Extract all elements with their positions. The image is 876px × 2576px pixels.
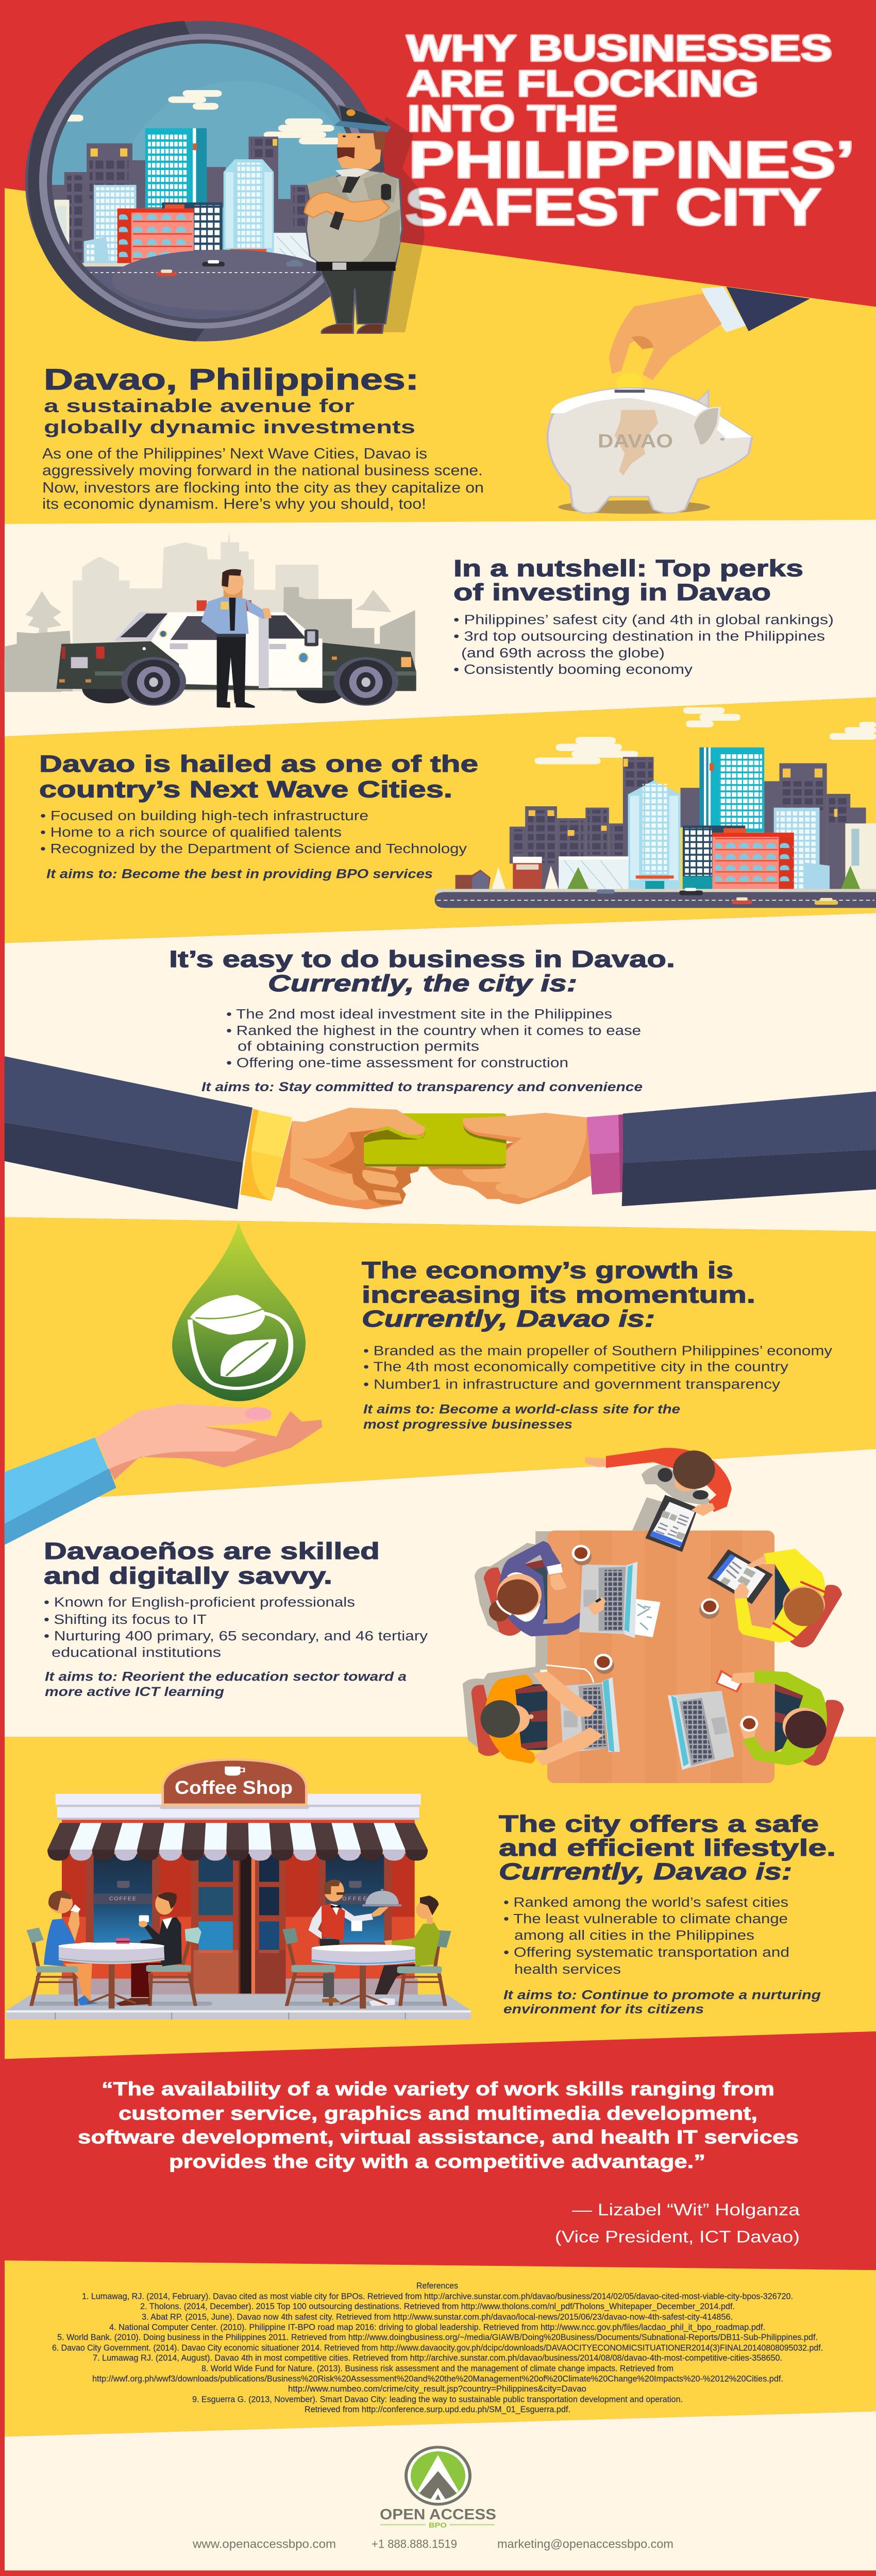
easy to do business text block: It’s easy to do business in Davao. (169, 946, 675, 972)
intro text block: aggressively moving forward in the national business scene. (42, 463, 483, 479)
pavement (6, 1978, 471, 2020)
references: 4. National Computer Center. (2010). Philippine IT-BPO road map 2016: driving to global leadership. Retrieved from http://www.ncc.gov.ph/files/lacdao_phil_it_bpo_roadmap.pdf. (109, 2322, 765, 2332)
references: http://wwf.org.ph/wwf3/downloads/publications/Business%20Risk%20Assessment%20and%20the%20Management%20of%20Climate%20Change%20Impacts%20-%2012%20Cities.pdf. (92, 2374, 783, 2383)
quote: customer service, graphics and multimedia development, (119, 2103, 757, 2124)
contact details: marketing@openaccessbpo.com (497, 2538, 673, 2551)
person in yellow with tablet (707, 1549, 826, 1642)
intro text block: a sustainable avenue for (44, 396, 355, 416)
quote (78, 2079, 799, 2173)
next wave cities text block: Davao is hailed as one of the (39, 751, 478, 777)
illustration: coffee shop storefront (6, 1758, 471, 2020)
references: http://www.numbeo.com/crime/city_result.jsp?country=Philippines&city=Davao (288, 2384, 586, 2394)
illustration: police officer, car and skyline silhouette (5, 532, 416, 708)
sleeve (5, 1437, 116, 1545)
laptop with sketch paper (579, 1562, 661, 1638)
easy to do business text block (169, 946, 675, 1094)
skilled and savvy text block: Davaoeños are skilled (44, 1538, 380, 1564)
intro text block (42, 363, 484, 512)
skilled and savvy text block: It aims to: Reorient the education sector toward a (45, 1669, 407, 1684)
title: PHILIPPINES’ (409, 130, 855, 189)
skilled and savvy text block: • Nurturing 400 primary, 65 secondary, and 46 tertiary (44, 1628, 428, 1643)
economy text block: • The 4th most economically competitive city in the country (363, 1359, 788, 1374)
economy text block: • Branded as the main propeller of Southern Philippines’ economy (363, 1343, 832, 1358)
next wave cities text block: It aims to: Become the best in providing BPO services (46, 867, 433, 881)
easy to do business text block: Currently, the city is: (268, 971, 577, 996)
skilled and savvy text block: more active ICT learning (45, 1684, 224, 1699)
quote attribution (555, 2201, 800, 2246)
intro text block: globally dynamic investments (44, 417, 415, 438)
nutshell text block (453, 555, 834, 677)
skyline silhouette (5, 532, 415, 692)
safe and efficient lifestyle text block: • The least vulnerable to climate change (503, 1911, 788, 1926)
economy text block (362, 1258, 832, 1432)
police car: POLICE (280, 656, 297, 661)
cars on road (157, 260, 303, 276)
title: SAFEST CITY (405, 178, 821, 236)
nutshell text block: (and 69th across the globe) (461, 645, 665, 660)
logo: Open Access BPO: OPEN ACCESS (380, 2507, 496, 2523)
facade (62, 1854, 415, 1994)
icon: coin (617, 372, 643, 394)
coffee cups (572, 1545, 719, 1674)
left hand (276, 1108, 426, 1210)
chairs (471, 1568, 844, 1766)
road (435, 888, 876, 908)
window lettering (109, 1896, 367, 1902)
wheels (121, 657, 398, 706)
skilled and savvy text block (44, 1538, 428, 1699)
illustration: green water drop held by open hand (5, 1222, 323, 1545)
window lettering: COFFEE (109, 1896, 136, 1902)
contact details: www.openaccessbpo.com (192, 2538, 336, 2551)
illustration: team around a table seen from above (463, 1448, 844, 1783)
economy text block: The economy’s growth is (362, 1258, 733, 1284)
safe and efficient lifestyle text block: and efficient lifestyle. (499, 1835, 836, 1861)
intro text block: its economic dynamism. Here’s why you should, too! (42, 496, 426, 512)
easy to do business text block: • Ranked the highest in the country when it comes to ease (226, 1023, 641, 1038)
card (364, 1113, 507, 1166)
hand (96, 1404, 323, 1480)
illustration: security guard (305, 105, 425, 333)
skilled and savvy text block: • Known for English-proficient professionals (44, 1595, 355, 1609)
safe and efficient lifestyle text block: environment for its citizens (503, 2002, 704, 2016)
nutshell text block: • 3rd top outsourcing destination in the Philippines (453, 629, 825, 643)
references: 9. Esguerra G. (2013, November). Smart Davao City: leading the way to sustainable public transportation development and operation. (192, 2394, 683, 2404)
skilled and savvy text block: and digitally savvy. (44, 1563, 332, 1589)
easy to do business text block: • Offering one-time assessment for construction (226, 1055, 568, 1070)
next wave cities text block: • Recognized by the Department of Science and Technology (40, 841, 467, 856)
references: References (416, 2281, 458, 2291)
next wave cities text block (39, 751, 478, 881)
hands and card (240, 1108, 591, 1210)
safe and efficient lifestyle text block: Currently, Davao is: (499, 1859, 792, 1885)
person in orange with laptop (481, 1665, 620, 1766)
person in purple with laptop (489, 1541, 595, 1636)
nutshell text block: • Consistently booming economy (453, 662, 693, 677)
quote: “The availability of a wide variety of work skills ranging from (102, 2079, 774, 2099)
safe and efficient lifestyle text block: • Ranked among the world’s safest cities (503, 1894, 788, 1910)
nutshell text block: of investing in Davao (453, 580, 771, 606)
shop sign label: Coffee Shop (175, 1778, 293, 1799)
economy text block: • Number1 in infrastructure and government transparency (363, 1377, 780, 1392)
right table with waiter and guest (282, 1879, 451, 2009)
clouds (535, 707, 876, 765)
illustration: city skyline with road (435, 707, 876, 908)
contact details (192, 2538, 673, 2551)
title (405, 28, 855, 236)
illustration: porthole city view (25, 21, 385, 342)
piggy bank label: DAVAO (598, 431, 673, 452)
roof band (56, 1794, 421, 1823)
easy to do business text block: It aims to: Stay committed to transparency and convenience (201, 1079, 643, 1094)
references: 2. Tholons. (2014, December). 2015 Top 100 outsourcing destinations. Retrieved from http://www.tholons.com/nl_pdf/Tholons_Whitepaper_December_2014.pdf. (140, 2301, 735, 2312)
buildings (456, 748, 876, 890)
skilled and savvy text block: • Shifting its focus to IT (44, 1612, 207, 1626)
table shadows (463, 1463, 711, 1750)
police car (57, 612, 416, 706)
safe and efficient lifestyle text block: The city offers a safe (499, 1811, 819, 1837)
icon: logo emblem (405, 2446, 471, 2505)
shop sign (161, 1758, 308, 1806)
easy to do business text block: of obtaining construction permits (238, 1039, 479, 1054)
illustration: handshake passing a card (5, 1056, 876, 1210)
quote: software development, virtual assistance, and health IT services (78, 2127, 799, 2148)
safe and efficient lifestyle text block: • Offering systematic transportation and (503, 1945, 789, 1960)
safe and efficient lifestyle text block (499, 1811, 836, 2016)
contact details: +1 888.888.1519 (372, 2538, 457, 2551)
intro text block: As one of the Philippines’ Next Wave Cities, Davao is (42, 446, 427, 462)
next wave cities text block: • Home to a rich source of qualified talents (40, 825, 342, 840)
quote attribution: (Vice President, ICT Davao) (555, 2228, 800, 2246)
sleeves (5, 1056, 876, 1209)
references: 8. World Wide Fund for Nature. (2013). Business risk assessment and the management of climate change impacts. Retrieved from (201, 2364, 673, 2373)
references (52, 2281, 823, 2415)
easy to do business text block: • The 2nd most ideal investment site in the Philippines (226, 1006, 612, 1021)
awning (47, 1823, 428, 1861)
person in red with tablet (585, 1448, 732, 1552)
logo: Open Access BPO (380, 2446, 496, 2530)
safe and efficient lifestyle text block: among all cities in the Philippines (514, 1928, 754, 1943)
safe and efficient lifestyle text block: It aims to: Continue to promote a nurturing (503, 1988, 821, 2002)
left table with couple (27, 1891, 201, 2009)
next wave cities text block: • Focused on building high-tech infrastructure (40, 808, 368, 823)
left cuff (240, 1109, 292, 1201)
skilled and savvy text block: educational institutions (52, 1645, 221, 1660)
illustration: hand dropping coin into piggy bank (548, 287, 810, 514)
nutshell text block: In a nutshell: Top perks (453, 555, 803, 582)
title: WHY BUSINESSES (407, 28, 832, 69)
references: Retrieved from http://conference.surp.upd.edu.ph/SM_01_Esguerra.pdf. (305, 2404, 570, 2415)
quote: provides the city with a competitive advantage.” (169, 2151, 705, 2173)
icon: sleeve and hand (609, 287, 810, 380)
table (547, 1531, 774, 1783)
title: ARE FLOCKING (407, 63, 759, 105)
economy text block: It aims to: Become a world-class site for the (363, 1402, 680, 1416)
drop (172, 1222, 306, 1401)
police officer (197, 569, 272, 708)
window lettering: OFFEE (342, 1896, 367, 1902)
intro text block: Davao, Philippines: (44, 363, 419, 396)
seated torsos (515, 1560, 806, 1752)
icon: piggy bank (548, 388, 752, 514)
economy text block: increasing its momentum. (362, 1282, 755, 1308)
logo: Open Access BPO: BPO (429, 2521, 447, 2530)
nutshell text block: • Philippines’ safest city (and 4th in global rankings) (453, 612, 834, 627)
safe and efficient lifestyle text block: health services (514, 1962, 621, 1977)
economy text block: Currently, Davao is: (362, 1306, 655, 1332)
intro text block: Now, investors are flocking into the city as they capitalize on (42, 480, 484, 496)
title: INTO THE (408, 98, 618, 139)
economy text block: most progressive businesses (363, 1417, 572, 1432)
references: 3. Abat RP. (2015, June). Davao now 4th safest city. Retrieved from http://www.sunstar.com.ph/davao/local-news/2015/06/23/davao-now-4th-safest-city-414856. (142, 2312, 733, 2321)
quote attribution: — Lizabel “Wit” Holganza (572, 2201, 800, 2219)
references: 7. Lumawag RJ. (2014, August). Davao 4th in most competitive cities. Retrieved from http://archive.sunstar.com.ph/davao/business/2014/08/08/davao-4th-most-competitive-cities-358650. (93, 2353, 782, 2363)
next wave cities text block: country’s Next Wave Cities. (39, 776, 452, 803)
person in green with laptop (668, 1670, 827, 1770)
right hand (427, 1113, 591, 1204)
